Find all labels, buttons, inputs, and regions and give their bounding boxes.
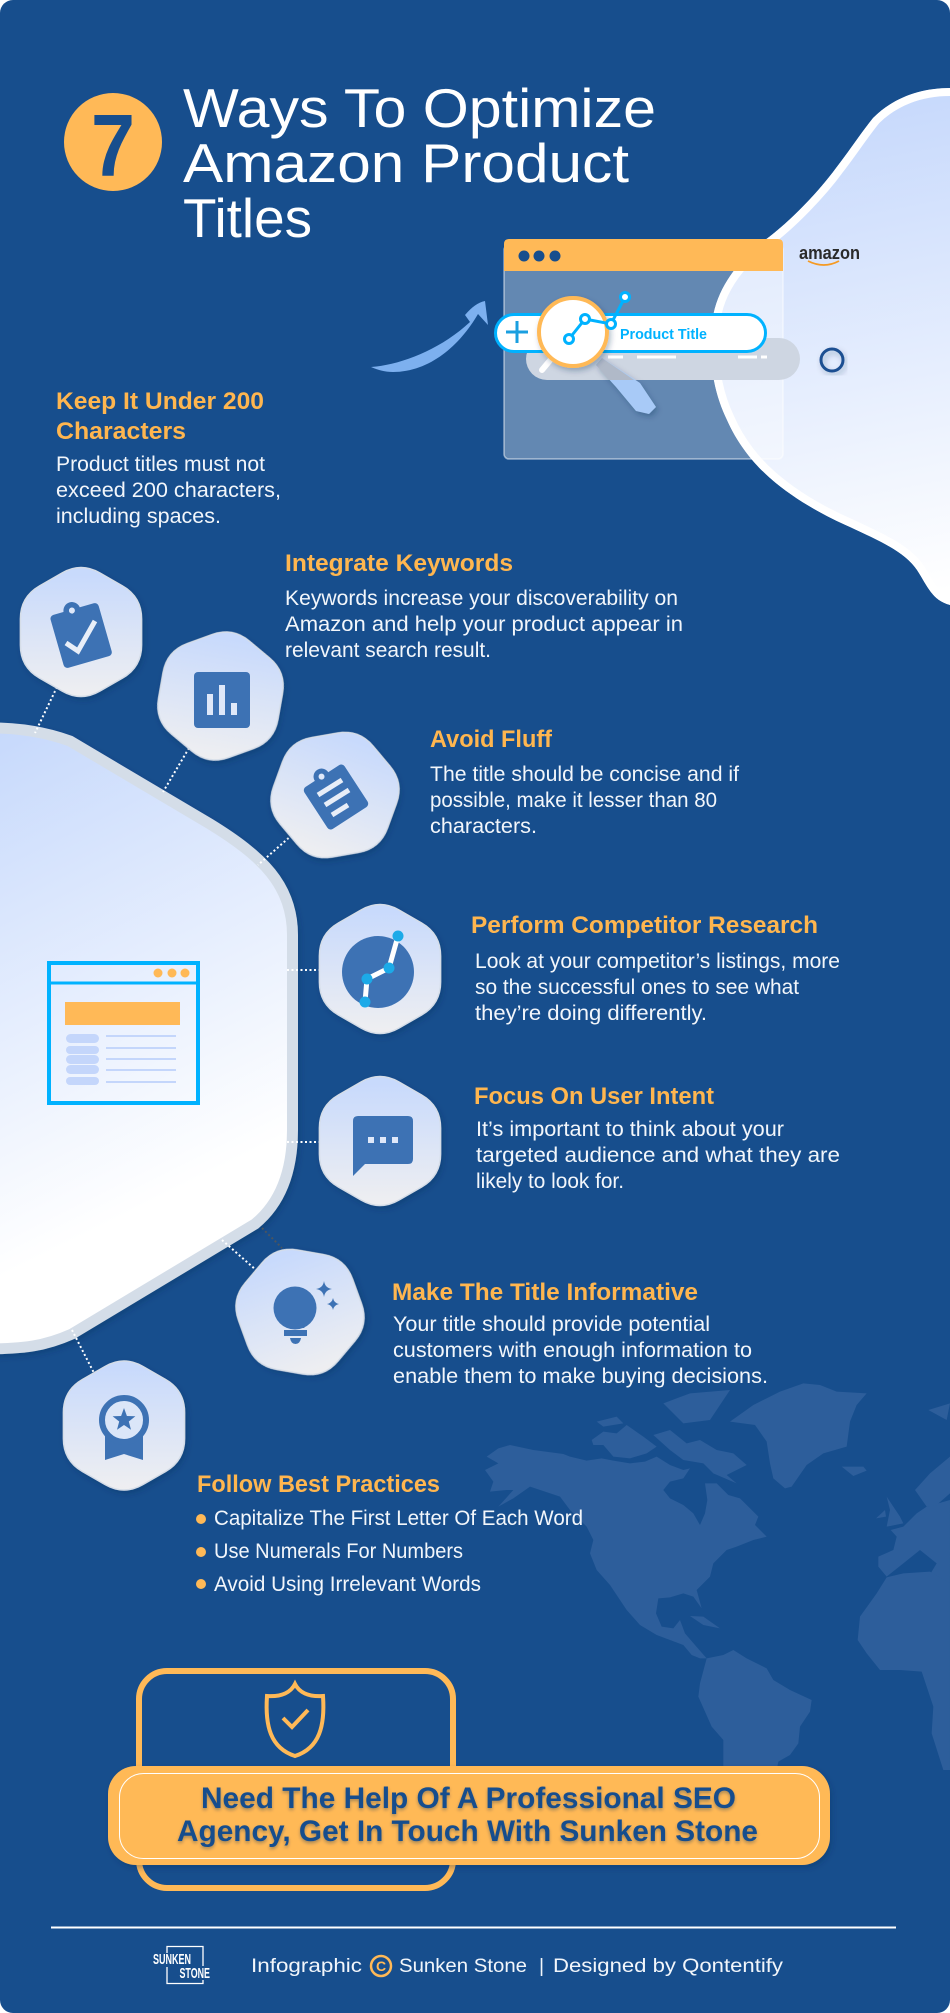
- hexagon 4: growth chart: [319, 904, 441, 1034]
- call-to-action banner: Need The Help Of A Professional SEO: [201, 1782, 736, 1815]
- title: [183, 77, 656, 249]
- title: Titles: [183, 187, 312, 249]
- footer credit: Infographic: [251, 1955, 362, 1977]
- hexagon 3: clipboard: [256, 714, 414, 876]
- section: perform competitor research: they’re doing differently.: [475, 1002, 707, 1025]
- section: focus on user intent: Focus On User Intent: [474, 1083, 714, 1110]
- logo: sunken stone: STONE: [180, 1965, 210, 1982]
- section: integrate keywords: relevant search result.: [285, 639, 491, 662]
- section: integrate keywords: Integrate Keywords: [285, 550, 513, 577]
- section: keep it under 200 characters: including spaces.: [56, 505, 221, 528]
- section: avoid fluff: The title should be concise and if: [430, 763, 739, 786]
- section: perform competitor research: Perform Competitor Research: [471, 912, 818, 939]
- section: make the title informative: customers with enough information to: [393, 1339, 752, 1362]
- section: focus on user intent: targeted audience and what they are: [476, 1144, 840, 1167]
- number badge: 7: [91, 96, 135, 195]
- section: keep it under 200 characters: [56, 388, 281, 528]
- number badge: [64, 93, 162, 195]
- section: perform competitor research: so the successful ones to see what: [475, 976, 799, 999]
- logo: sunken stone: [153, 1946, 210, 1984]
- section: make the title informative: Make The Title Informative: [392, 1279, 698, 1306]
- section: avoid fluff: possible, make it lesser than 80: [430, 789, 717, 812]
- section: integrate keywords: [285, 550, 683, 662]
- browser window illustration: [496, 239, 800, 459]
- hexagon 1: checklist: [20, 568, 142, 696]
- section: keep it under 200 characters: Product titles must not: [56, 453, 265, 476]
- hexagon 7: medal: [63, 1361, 185, 1490]
- central panel: [0, 728, 292, 1349]
- section: focus on user intent: [474, 1083, 840, 1193]
- section: perform competitor research: Look at your competitor’s listings, more: [475, 950, 840, 973]
- section: keep it under 200 characters: Keep It Under 200: [56, 388, 264, 415]
- section: follow best practices: Capitalize The First Letter Of Each Word: [214, 1507, 583, 1530]
- section: integrate keywords: Amazon and help your product appear in: [285, 613, 683, 636]
- hexagon 6: light bulb: [221, 1231, 379, 1393]
- section: perform competitor research: [471, 912, 840, 1025]
- section: keep it under 200 characters: Characters: [56, 418, 186, 445]
- world map: [485, 1383, 950, 1770]
- section: focus on user intent: It’s important to think about your: [476, 1118, 784, 1141]
- section: integrate keywords: Keywords increase your discoverability on: [285, 587, 678, 610]
- top-right blob: [711, 88, 950, 605]
- footer credit: [251, 1955, 783, 1977]
- footer credit: C: [376, 1958, 386, 1974]
- footer credit: |: [539, 1955, 544, 1977]
- section: follow best practices: Follow Best Practices: [197, 1471, 440, 1498]
- icon: ring: [821, 349, 843, 371]
- section: follow best practices: Avoid Using Irrelevant Words: [214, 1573, 481, 1596]
- connectors: [35, 687, 320, 1373]
- logo: sunken stone: SUNKEN: [153, 1951, 191, 1968]
- icon: amazon arrow: [371, 301, 488, 372]
- title: Amazon Product: [183, 132, 629, 194]
- hexagon 2: bar chart: [150, 622, 291, 770]
- section: keep it under 200 characters: exceed 200 characters,: [56, 479, 281, 502]
- amazon logo: amazon: [799, 243, 860, 263]
- section: make the title informative: Your title should provide potential: [393, 1313, 710, 1336]
- section: avoid fluff: [430, 726, 739, 838]
- section: make the title informative: [392, 1279, 768, 1388]
- footer divider: [51, 1926, 896, 1928]
- title: Ways To Optimize: [183, 77, 656, 139]
- footer credit: Sunken Stone: [399, 1955, 527, 1977]
- call-to-action banner: [108, 1766, 830, 1865]
- icon: browser page: [49, 963, 198, 1103]
- section: follow best practices: Use Numerals For Numbers: [214, 1540, 463, 1563]
- browser window illustration: Product Title: [620, 326, 707, 343]
- hexagon 5: speech bubble: [319, 1076, 441, 1206]
- call-to-action banner: Agency, Get In Touch With Sunken Stone: [177, 1815, 758, 1848]
- footer credit: Designed by Qontentify: [553, 1955, 783, 1977]
- section: focus on user intent: likely to look for.: [476, 1170, 624, 1193]
- icon: shield: [267, 1684, 323, 1756]
- section: make the title informative: enable them to make buying decisions.: [393, 1365, 768, 1388]
- section: follow best practices: [196, 1471, 583, 1596]
- section: avoid fluff: Avoid Fluff: [430, 726, 553, 753]
- section: avoid fluff: characters.: [430, 815, 537, 838]
- call-to-action frame: [139, 1671, 453, 1888]
